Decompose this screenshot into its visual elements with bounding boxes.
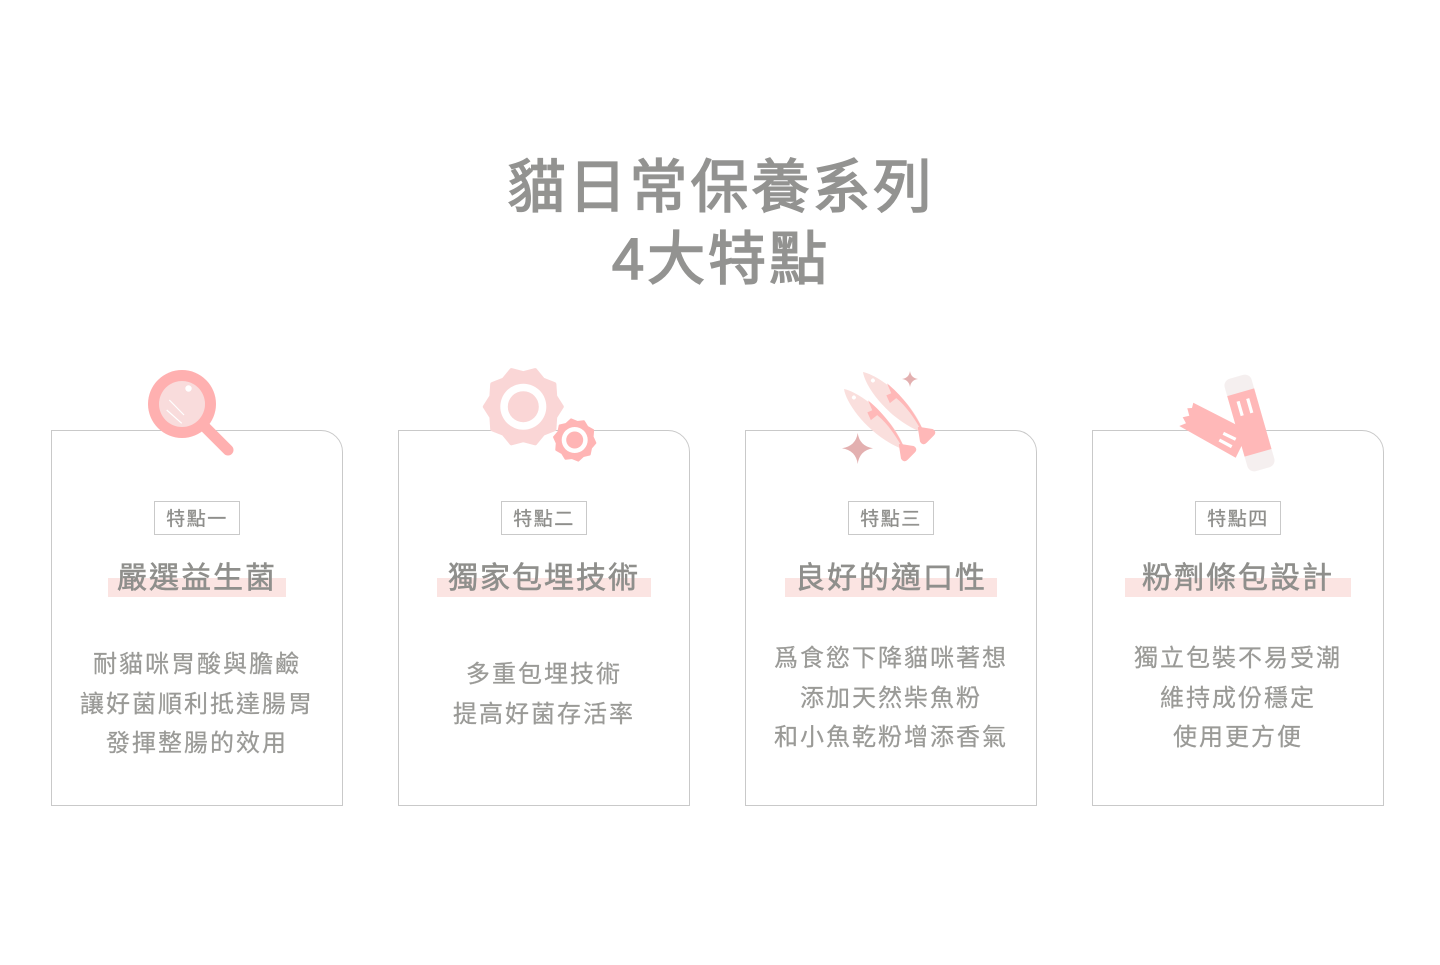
- description: [453, 661, 635, 728]
- description: 讓好菌順利抵達腸胃: [80, 690, 314, 718]
- title: 4大特點: [612, 227, 830, 292]
- description: 提高好菌存活率: [453, 700, 635, 728]
- description: 使用更方便: [1173, 724, 1303, 751]
- heading: 粉劑條包設計: [1142, 562, 1334, 595]
- panel: feature four: [1092, 374, 1384, 806]
- description: 發揮整腸的效用: [106, 730, 288, 757]
- title: 貓日常保養系列: [507, 155, 934, 220]
- panel: feature one: [51, 370, 343, 806]
- label: feature four: [1195, 501, 1281, 535]
- heading: 獨家包埋技術: [448, 562, 640, 595]
- label: feature one: 特點一: [166, 509, 228, 530]
- icon: gears: [482, 368, 596, 462]
- description: [80, 651, 314, 757]
- description: 耐貓咪胃酸與膽鹼: [93, 651, 301, 678]
- panel: feature three: [745, 372, 1037, 806]
- icon: fish and sparkles: [842, 372, 936, 464]
- label: feature two: 特點二: [513, 509, 575, 530]
- description: 和小魚乾粉增添香氣: [774, 724, 1008, 751]
- label: feature three: [848, 501, 934, 535]
- highlight bar: [1125, 578, 1351, 597]
- title: [507, 155, 934, 292]
- label: feature four: 特點四: [1207, 509, 1269, 530]
- description: [1134, 645, 1342, 751]
- description: 多重包埋技術: [466, 661, 622, 688]
- description: 爲食慾下降貓咪著想: [774, 645, 1008, 672]
- description: 維持成份穩定: [1160, 684, 1316, 712]
- panel: feature two: [398, 368, 690, 806]
- description: 添加天然柴魚粉: [800, 684, 982, 712]
- icon: magnifying glass: [148, 370, 234, 456]
- label: feature two: [501, 501, 587, 535]
- highlight bar: [437, 578, 651, 597]
- label: feature three: 特點三: [860, 509, 922, 530]
- heading: 良好的適口性: [795, 562, 987, 595]
- label: feature one: [154, 501, 240, 535]
- card frame: [398, 430, 690, 806]
- description: [774, 645, 1008, 751]
- card frame: [745, 430, 1037, 806]
- description: 獨立包裝不易受潮: [1134, 645, 1342, 672]
- highlight bar: [108, 578, 286, 597]
- card frame: [1092, 430, 1384, 806]
- highlight bar: [785, 578, 997, 597]
- card frame: [51, 430, 343, 806]
- icon: powder sticks: [1180, 374, 1274, 472]
- heading: 嚴選益生菌: [117, 562, 277, 595]
